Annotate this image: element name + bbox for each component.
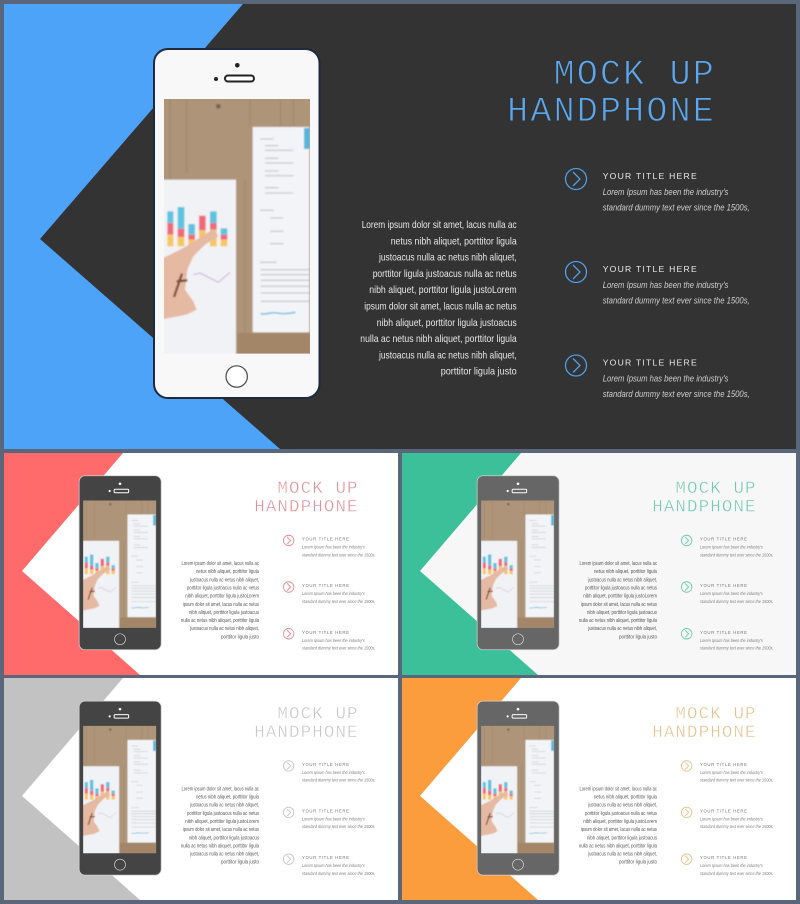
dark arrow shape bbox=[40, 4, 796, 449]
item 1: YOUR TITLE HERE bbox=[700, 762, 747, 767]
phone mockup bbox=[477, 476, 559, 650]
item 2: Lorem Ipsum has been the industry's bbox=[700, 591, 763, 596]
body paragraph: porttitor ligula justoacus nulla ac netus bbox=[187, 811, 259, 817]
item 1: standard dummy text ever since the 1500s, bbox=[700, 778, 774, 783]
background green bbox=[402, 453, 796, 675]
item 1: YOUR TITLE HERE bbox=[603, 171, 697, 181]
title: MOCK UP bbox=[277, 704, 359, 724]
body paragraph: justoacus nulla ac netus nibh aliquet, bbox=[587, 803, 657, 809]
item 1: Lorem Ipsum has been the industry's bbox=[603, 187, 729, 197]
body paragraph: ipsum dolor sit amet, lacus nulla ac netus bbox=[183, 827, 259, 833]
item 1: YOUR TITLE HERE bbox=[700, 536, 747, 542]
background orange bbox=[402, 678, 796, 900]
background blue bbox=[4, 4, 796, 449]
item 3 bbox=[681, 628, 774, 651]
body paragraph: Lorem ipsum dolor sit amet, lacus nulla ac bbox=[362, 219, 517, 231]
title bbox=[507, 55, 716, 132]
item 3 bbox=[681, 854, 774, 876]
item 1: standard dummy text ever since the 1500s, bbox=[302, 778, 376, 783]
background gray bbox=[4, 678, 398, 900]
body paragraph: nulla ac netus nibh aliquet, porttitor ligula bbox=[579, 843, 657, 849]
item 2: standard dummy text ever since the 1500s, bbox=[302, 599, 376, 604]
item 3: Lorem Ipsum has been the industry's bbox=[700, 638, 763, 643]
item 3: standard dummy text ever since the 1500s, bbox=[700, 646, 774, 651]
title: HANDPHONE bbox=[254, 723, 359, 743]
item 1: Lorem Ipsum has been the industry's bbox=[700, 544, 763, 550]
body paragraph: nibh aliquet, porttitor ligula justoLorem bbox=[583, 819, 658, 825]
item 1: YOUR TITLE HERE bbox=[302, 536, 349, 542]
body paragraph: Lorem ipsum dolor sit amet, lacus nulla ac bbox=[580, 561, 657, 567]
title: HANDPHONE bbox=[652, 498, 757, 518]
item 3: YOUR TITLE HERE bbox=[603, 358, 697, 368]
background coral bbox=[4, 453, 398, 675]
body paragraph: justoacus nulla ac netus nibh aliquet, bbox=[378, 349, 517, 361]
body paragraph: ipsum dolor sit amet, lacus nulla ac netus bbox=[581, 827, 657, 833]
panel: orange slide bbox=[402, 678, 796, 900]
item 2 bbox=[681, 582, 774, 604]
title bbox=[254, 479, 359, 518]
item 1 bbox=[283, 761, 376, 783]
item 2: Lorem Ipsum has been the industry's bbox=[302, 591, 365, 596]
body paragraph: ipsum dolor sit amet, lacus nulla ac netus bbox=[364, 300, 517, 312]
item 1: standard dummy text ever since the 1500s, bbox=[302, 552, 376, 557]
body paragraph: porttitor ligula justoacus nulla ac netus bbox=[373, 268, 517, 280]
body paragraph: nibh aliquet, porttitor ligula justoLorem bbox=[185, 594, 260, 600]
item 1: Lorem Ipsum has been the industry's bbox=[302, 770, 365, 775]
item 1: Lorem Ipsum has been the industry's bbox=[302, 544, 365, 550]
light arrow shape bbox=[420, 453, 796, 675]
title bbox=[652, 479, 757, 518]
item 3: YOUR TITLE HERE bbox=[700, 630, 747, 635]
item 3: Lorem Ipsum has been the industry's bbox=[603, 374, 729, 384]
panel: coral slide bbox=[4, 453, 398, 675]
phone mockup bbox=[79, 701, 161, 875]
item 3: YOUR TITLE HERE bbox=[700, 855, 747, 860]
body paragraph: netus nibh aliquet, porttitor ligula bbox=[196, 795, 259, 801]
item 2: Lorem Ipsum has been the industry's bbox=[302, 816, 365, 821]
item 1: YOUR TITLE HERE bbox=[302, 762, 349, 767]
body paragraph: nibh aliquet, porttitor ligula justoLorem bbox=[369, 284, 517, 296]
title: MOCK UP bbox=[277, 479, 359, 499]
body paragraph: nibh aliquet, porttitor ligula justoLorem bbox=[583, 594, 658, 600]
item 1: standard dummy text ever since the 1500s, bbox=[603, 203, 750, 213]
item 1: Lorem Ipsum has been the industry's bbox=[700, 770, 763, 775]
body paragraph: justoacus nulla ac netus nibh aliquet, bbox=[587, 577, 657, 583]
title: MOCK UP bbox=[554, 55, 716, 95]
body paragraph: porttitor ligula justoacus nulla ac netus bbox=[585, 811, 657, 817]
body paragraph: Lorem ipsum dolor sit amet, lacus nulla ac bbox=[580, 786, 657, 792]
body paragraph: nulla ac netus nibh aliquet, porttitor ligula bbox=[181, 618, 259, 624]
item 1 bbox=[681, 535, 774, 557]
title: MOCK UP bbox=[675, 479, 757, 499]
body paragraph bbox=[360, 219, 517, 378]
body paragraph bbox=[181, 786, 260, 866]
body paragraph: porttitor ligula justo bbox=[221, 634, 259, 640]
body paragraph: justoacus nulla ac netus nibh aliquet, bbox=[189, 803, 259, 809]
body paragraph bbox=[579, 561, 658, 640]
body paragraph: justoacus nulla ac netus nibh aliquet, bbox=[189, 852, 259, 858]
item 2: standard dummy text ever since the 1500s, bbox=[302, 824, 376, 829]
white arrow shape bbox=[22, 678, 398, 900]
item 1 bbox=[283, 535, 376, 557]
body paragraph: porttitor ligula justo bbox=[441, 366, 517, 378]
body paragraph: nibh aliquet, porttitor ligula justoacus bbox=[189, 610, 259, 616]
body paragraph: ipsum dolor sit amet, lacus nulla ac netus bbox=[581, 602, 657, 608]
body paragraph: porttitor ligula justo bbox=[619, 860, 657, 866]
body paragraph: justoacus nulla ac netus nibh aliquet, bbox=[189, 577, 259, 583]
body paragraph: Lorem ipsum dolor sit amet, lacus nulla ac bbox=[182, 786, 259, 792]
body paragraph: nibh aliquet, porttitor ligula justoacus bbox=[587, 610, 657, 616]
panel: green slide bbox=[402, 453, 796, 675]
panel: main slide blue bbox=[4, 4, 796, 449]
item 3 bbox=[283, 628, 376, 651]
item 3: YOUR TITLE HERE bbox=[302, 855, 349, 860]
item 3: standard dummy text ever since the 1500s, bbox=[302, 646, 376, 651]
body paragraph: netus nibh aliquet, porttitor ligula bbox=[391, 235, 517, 247]
title: HANDPHONE bbox=[254, 498, 359, 518]
body paragraph: nulla ac netus nibh aliquet, porttitor ligula bbox=[360, 333, 517, 345]
item 2: YOUR TITLE HERE bbox=[302, 808, 349, 813]
title: HANDPHONE bbox=[507, 92, 716, 132]
item 2: YOUR TITLE HERE bbox=[700, 583, 747, 588]
item 3: standard dummy text ever since the 1500s, bbox=[302, 871, 376, 876]
body paragraph: porttitor ligula justo bbox=[221, 860, 259, 866]
item 2: Lorem Ipsum has been the industry's bbox=[603, 280, 729, 290]
body paragraph bbox=[181, 561, 260, 640]
body paragraph: justoacus nulla ac netus nibh aliquet, bbox=[587, 626, 657, 632]
title bbox=[254, 704, 359, 743]
item 2: YOUR TITLE HERE bbox=[603, 264, 697, 274]
body paragraph: porttitor ligula justoacus nulla ac netus bbox=[187, 585, 259, 591]
phone mockup bbox=[79, 476, 161, 650]
body paragraph: nulla ac netus nibh aliquet, porttitor ligula bbox=[181, 843, 259, 849]
white arrow shape bbox=[22, 453, 398, 675]
item 2 bbox=[681, 807, 774, 829]
panel: gray slide bbox=[4, 678, 398, 900]
white arrow shape bbox=[420, 678, 796, 900]
item 1: standard dummy text ever since the 1500s, bbox=[700, 552, 774, 557]
body paragraph: Lorem ipsum dolor sit amet, lacus nulla ac bbox=[182, 561, 259, 567]
title bbox=[652, 704, 757, 743]
item 2: standard dummy text ever since the 1500s, bbox=[700, 824, 774, 829]
item 1 bbox=[681, 761, 774, 783]
item 3: standard dummy text ever since the 1500s, bbox=[603, 389, 750, 399]
body paragraph: porttitor ligula justoacus nulla ac netus bbox=[585, 585, 657, 591]
body paragraph: nulla ac netus nibh aliquet, porttitor ligula bbox=[579, 618, 657, 624]
body paragraph: ipsum dolor sit amet, lacus nulla ac netus bbox=[183, 602, 259, 608]
body paragraph: netus nibh aliquet, porttitor ligula bbox=[594, 569, 657, 575]
body paragraph: justoacus nulla ac netus nibh aliquet, bbox=[587, 852, 657, 858]
body paragraph: nibh aliquet, porttitor ligula justoLorem bbox=[185, 819, 260, 825]
item 2: standard dummy text ever since the 1500s, bbox=[700, 599, 774, 604]
item 3: Lorem Ipsum has been the industry's bbox=[700, 863, 763, 868]
item 3 bbox=[283, 854, 376, 876]
phone mockup bbox=[154, 49, 320, 398]
item 2 bbox=[283, 582, 376, 604]
body paragraph: nibh aliquet, porttitor ligula justoacus bbox=[189, 835, 259, 841]
item 2 bbox=[566, 262, 750, 306]
body paragraph: justoacus nulla ac netus nibh aliquet, bbox=[378, 252, 517, 264]
phone mockup bbox=[477, 701, 559, 875]
item 2: YOUR TITLE HERE bbox=[302, 583, 349, 588]
item 1 bbox=[566, 168, 750, 213]
item 3: Lorem Ipsum has been the industry's bbox=[302, 638, 365, 643]
item 2: standard dummy text ever since the 1500s, bbox=[603, 296, 750, 306]
body paragraph bbox=[579, 786, 658, 866]
item 3: Lorem Ipsum has been the industry's bbox=[302, 863, 365, 868]
item 3: YOUR TITLE HERE bbox=[302, 630, 349, 635]
title: HANDPHONE bbox=[652, 723, 757, 743]
body paragraph: porttitor ligula justo bbox=[619, 634, 657, 640]
item 2: Lorem Ipsum has been the industry's bbox=[700, 816, 763, 821]
body paragraph: justoacus nulla ac netus nibh aliquet, bbox=[189, 626, 259, 632]
item 3 bbox=[566, 355, 750, 399]
body paragraph: netus nibh aliquet, porttitor ligula bbox=[196, 569, 259, 575]
item 2 bbox=[283, 807, 376, 829]
title: MOCK UP bbox=[675, 704, 757, 724]
item 2: YOUR TITLE HERE bbox=[700, 808, 747, 813]
body paragraph: nibh aliquet, porttitor ligula justoacus bbox=[587, 835, 657, 841]
body paragraph: netus nibh aliquet, porttitor ligula bbox=[594, 795, 657, 801]
body paragraph: nibh aliquet, porttitor ligula justoacus bbox=[377, 317, 517, 329]
item 3: standard dummy text ever since the 1500s, bbox=[700, 871, 774, 876]
